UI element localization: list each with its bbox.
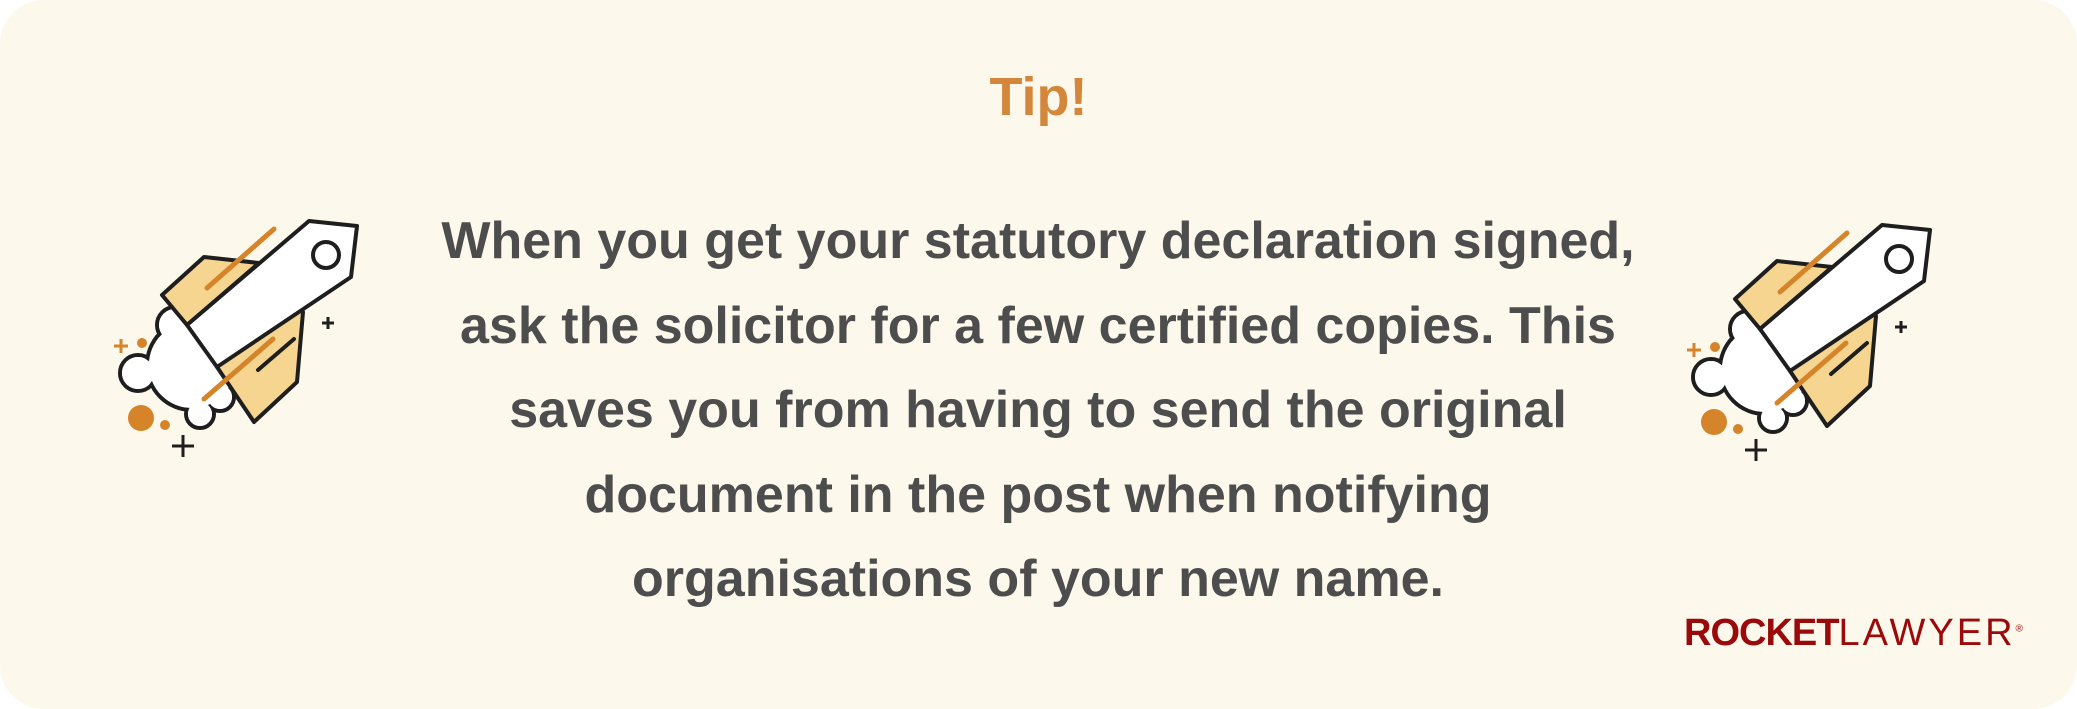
body text: saves you from having to send the original xyxy=(509,381,1567,439)
icon: rocket left xyxy=(114,219,359,457)
logo: ROCKETLAWYER® xyxy=(1684,612,2024,654)
title: Tip! xyxy=(990,67,1087,127)
body text xyxy=(441,212,1635,608)
body text: When you get your statutory declaration signed, xyxy=(441,212,1635,270)
body text: ask the solicitor for a few certified copies. This xyxy=(460,296,1616,354)
body text: document in the post when notifying xyxy=(584,466,1492,524)
icon: rocket right xyxy=(1687,223,1932,461)
body text: organisations of your new name. xyxy=(632,550,1444,608)
